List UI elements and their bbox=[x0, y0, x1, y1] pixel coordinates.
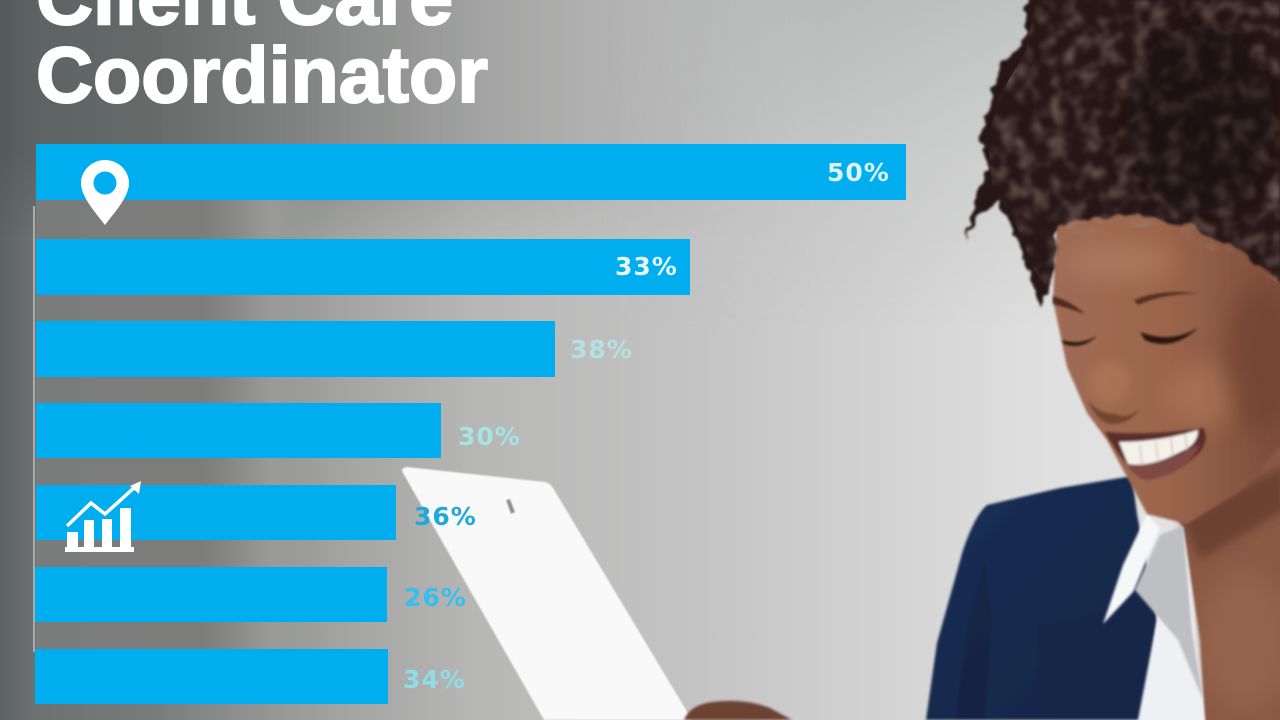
eyes and brows bbox=[1053, 292, 1198, 346]
face bbox=[1053, 190, 1280, 524]
bar chart bbox=[35, 144, 906, 704]
bar 5 bbox=[36, 485, 396, 540]
blazer bbox=[926, 476, 1157, 720]
value label 38%: 38% bbox=[570, 335, 633, 364]
smile bbox=[1105, 428, 1206, 480]
bar 6 bbox=[35, 567, 387, 622]
nose bbox=[1090, 360, 1130, 404]
value label 34%: 34% bbox=[403, 665, 466, 694]
value label 50%: 50% bbox=[827, 158, 890, 187]
bar 3 bbox=[36, 321, 555, 377]
neck and chest bbox=[1165, 410, 1280, 720]
person: smiling woman in navy blazer bbox=[682, 0, 1280, 720]
bar 4 bbox=[36, 403, 441, 458]
value label 33%: 33% bbox=[615, 252, 678, 281]
icon: location pin bbox=[81, 160, 129, 225]
hair bbox=[966, 0, 1280, 305]
title: Coordinator bbox=[36, 30, 488, 119]
shirt and collar bbox=[1103, 514, 1205, 720]
bar 7 bbox=[35, 649, 388, 704]
icon: growth chart bbox=[65, 481, 141, 552]
bar 1 bbox=[36, 144, 906, 200]
value label 30%: 30% bbox=[458, 422, 521, 451]
hand bbox=[684, 701, 792, 720]
value label 36%: 36% bbox=[414, 502, 477, 531]
value label 26%: 26% bbox=[404, 583, 467, 612]
bar 2 bbox=[36, 239, 690, 295]
